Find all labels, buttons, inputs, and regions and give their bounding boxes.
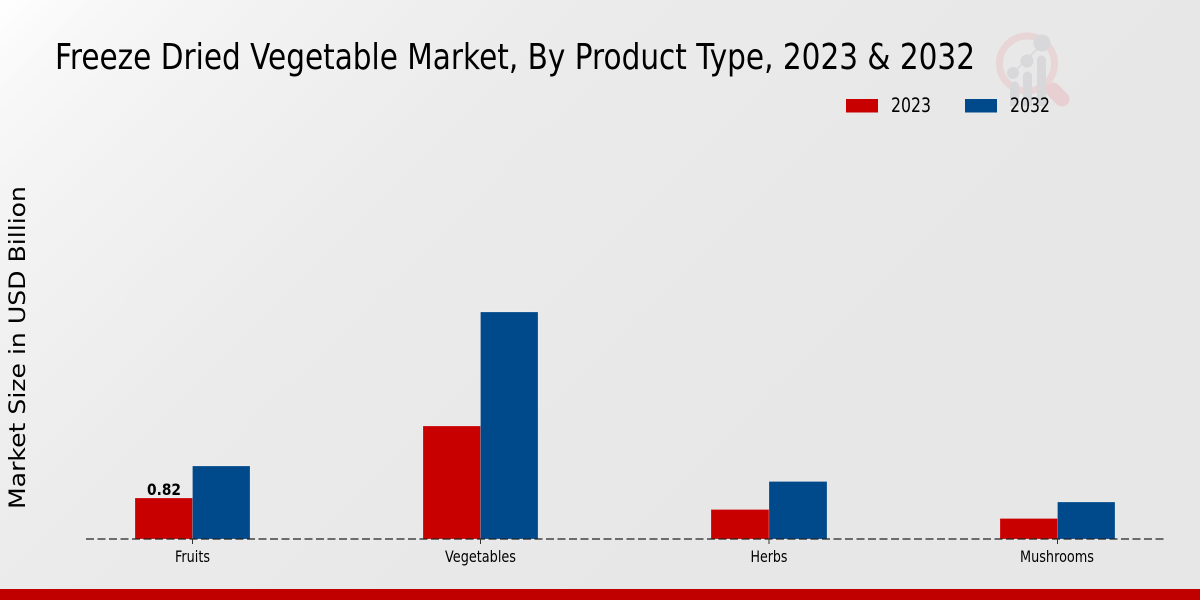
bars: Vegetables bbox=[423, 312, 538, 539]
x axis ticks bbox=[192, 539, 1058, 544]
bar chart bbox=[86, 312, 1164, 566]
x axis baseline bbox=[86, 538, 1164, 540]
bars: Herbs bbox=[711, 482, 827, 539]
bars: Fruits bbox=[135, 466, 250, 539]
x label: Mushrooms: Mushrooms bbox=[1020, 547, 1094, 566]
legend item: 2032: 2032 bbox=[1010, 94, 1050, 117]
x label: Fruits: Fruits bbox=[175, 547, 210, 566]
bars: Mushrooms bbox=[1000, 502, 1115, 539]
x label: Herbs: Herbs bbox=[750, 547, 788, 566]
icon: watermark logo bbox=[1000, 34, 1062, 106]
y axis label: Market Size in USD Billion bbox=[5, 186, 31, 509]
footer bar bbox=[0, 589, 1200, 600]
legend bbox=[846, 94, 1050, 117]
data label: 0.82: 0.82 bbox=[147, 480, 181, 499]
legend item: 2023 bbox=[846, 94, 931, 117]
legend item: 2023: 2023 bbox=[891, 94, 931, 117]
title: Freeze Dried Vegetable Market, By Product Type, 2023 & 2032 bbox=[55, 37, 975, 78]
legend item: 2032 bbox=[965, 94, 1050, 117]
x label: Vegetables: Vegetables bbox=[445, 547, 516, 566]
